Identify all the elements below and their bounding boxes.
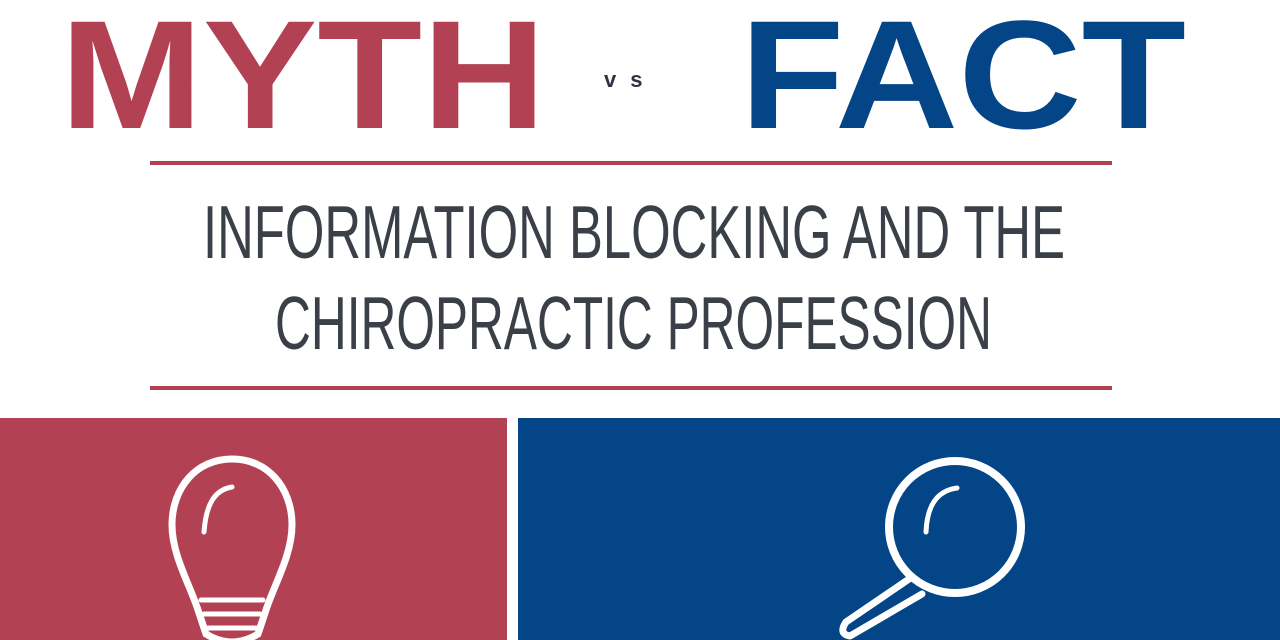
icon: magnifying glass (843, 461, 1021, 636)
vs label: vs (604, 67, 656, 92)
panel: fact (518, 418, 1280, 640)
panel: myth (0, 418, 507, 640)
icon: light bulb (172, 459, 292, 640)
subtitle (203, 190, 1065, 365)
